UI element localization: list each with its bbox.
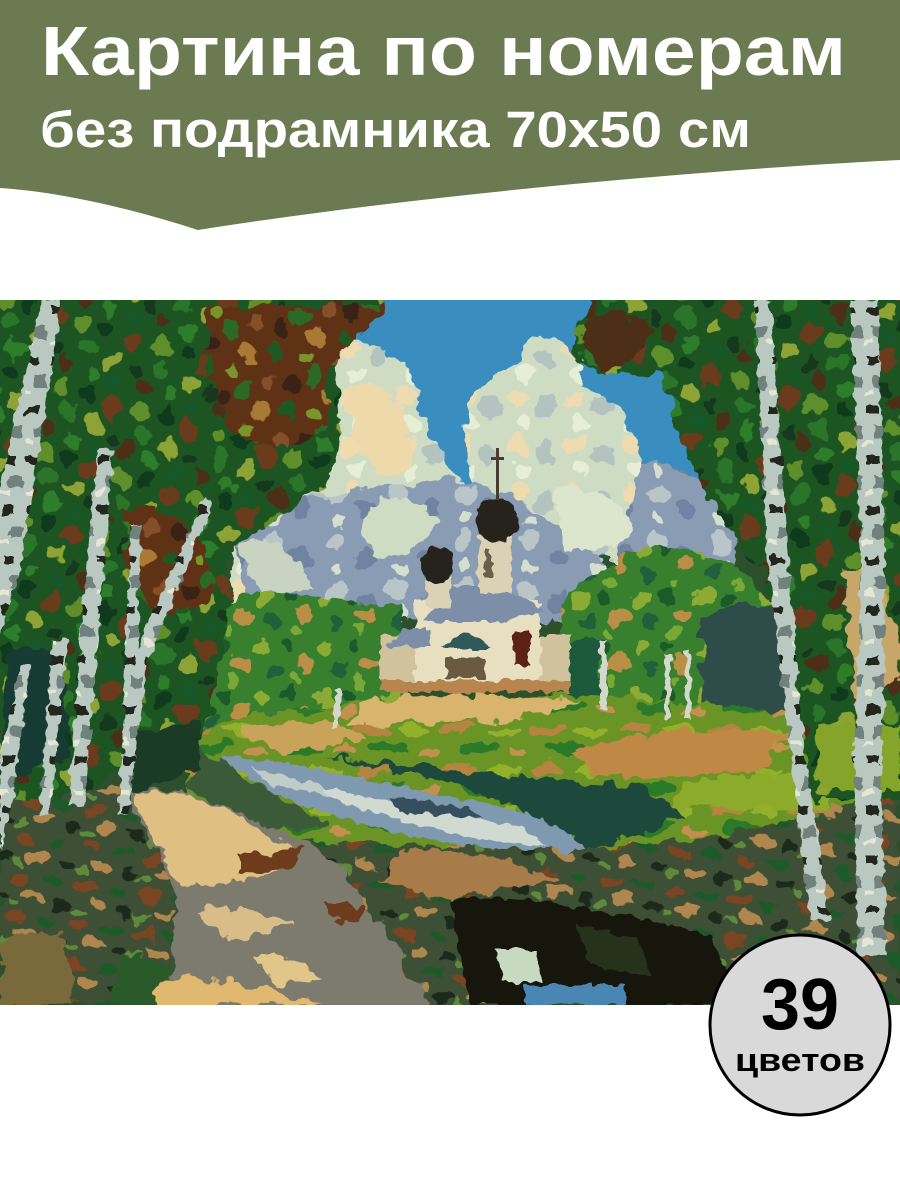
birch trunks	[0, 300, 886, 955]
church	[380, 498, 570, 692]
stream	[222, 756, 590, 856]
stream bank	[190, 745, 690, 850]
foreground bank	[0, 785, 900, 1005]
left foliage	[0, 295, 385, 800]
far trees	[190, 547, 800, 730]
path	[125, 785, 430, 1010]
subtitle: без подрамника 70х50 см	[40, 101, 751, 158]
dark water	[450, 898, 740, 1005]
sky	[354, 300, 700, 555]
header banner	[0, 0, 900, 230]
meadow	[184, 691, 855, 851]
right foliage	[576, 295, 900, 800]
color count badge	[710, 935, 890, 1115]
cross	[491, 448, 504, 500]
color count badge: цветов	[735, 1042, 865, 1078]
color count badge: 39	[761, 965, 839, 1045]
painting	[0, 295, 900, 1010]
title: Картина по номерам	[41, 12, 846, 90]
clouds	[230, 335, 735, 620]
base tone	[0, 300, 900, 1005]
